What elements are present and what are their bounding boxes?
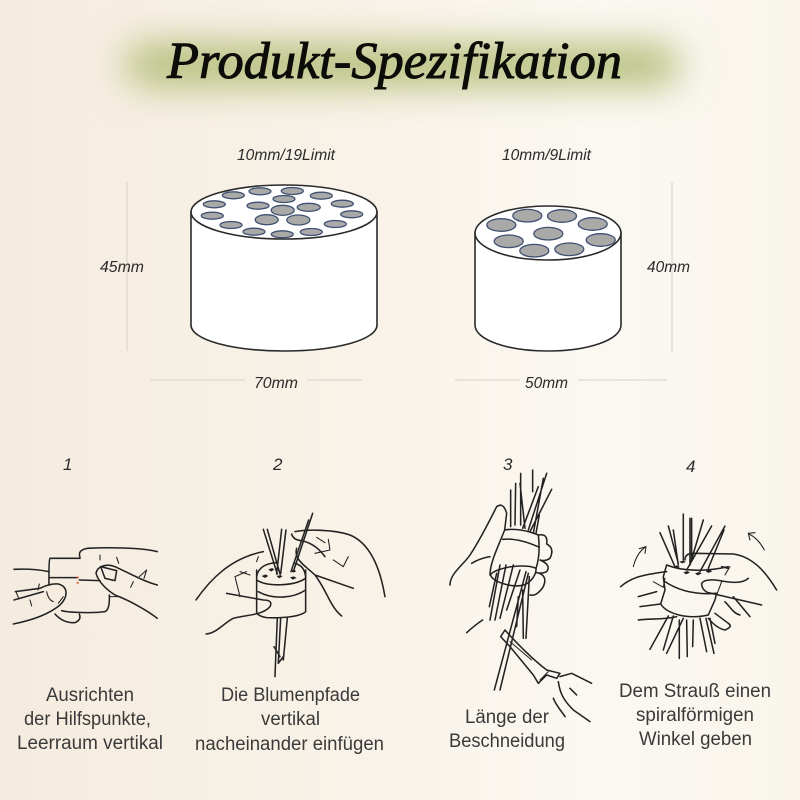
- title: Produkt-Spezifikation: [166, 33, 622, 90]
- dimension lines: [127, 182, 672, 380]
- label: large holder limit: 10mm/19Limit: [237, 147, 336, 164]
- dimension: 50mm: 50mm: [525, 375, 568, 392]
- caption: step 1: Ausrichten: [46, 685, 134, 706]
- large flower holder cylinder with 19 holes: [191, 185, 377, 351]
- small flower holder cylinder with 9 holes: [475, 206, 621, 351]
- caption: step 1: Leerraum vertikal: [17, 733, 163, 754]
- title banner glow: [125, 44, 680, 86]
- dimension: 70mm: 70mm: [254, 375, 298, 392]
- caption: step 4: Winkel geben: [639, 729, 752, 750]
- step number 1: 1: [63, 455, 72, 474]
- caption: step 4: Dem Strauß einen: [619, 681, 771, 702]
- step number 2: 2: [272, 455, 283, 474]
- illustration: step 1 aligning marks: [13, 548, 157, 624]
- label: small holder limit: 10mm/9Limit: [502, 147, 592, 164]
- step number 3: 3: [503, 455, 513, 474]
- dimension: 45mm: 45mm: [100, 259, 144, 276]
- illustration: step 3 trimming stems: [450, 470, 592, 722]
- caption: step 3: Beschneidung: [449, 731, 565, 752]
- caption: step 4: spiralförmigen: [636, 705, 754, 726]
- caption: step 2: nacheinander einfügen: [195, 734, 384, 755]
- illustration: step 4 spiral angle: [621, 514, 777, 658]
- illustration: step 2 inserting stems: [196, 513, 385, 677]
- step number 4: 4: [686, 457, 695, 476]
- caption: step 2: Die Blumenpfade: [221, 685, 360, 706]
- caption: step 1: der Hilfspunkte,: [24, 709, 151, 730]
- caption: step 3: Länge der: [465, 707, 550, 728]
- caption: step 2: vertikal: [261, 709, 320, 730]
- dimension: 40mm: 40mm: [647, 259, 690, 276]
